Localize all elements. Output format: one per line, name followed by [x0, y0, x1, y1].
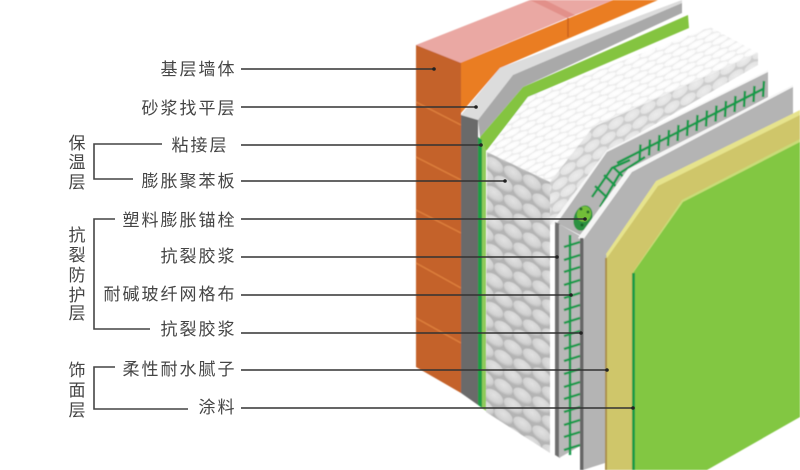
layer: mortar levelling coat: [461, 0, 682, 405]
group title: crack protection layer: 层: [68, 304, 86, 323]
leader: anchor: [241, 217, 587, 221]
leader: anti-crack mortar inner: [241, 255, 559, 259]
leader lines: [241, 67, 635, 410]
label: adhesive: 粘接层: [172, 136, 228, 155]
bracket: insulation layer: [94, 144, 162, 179]
label: mortar levelling coat: 砂浆找平层: [142, 99, 236, 118]
label: flexible waterproof putty: 柔性耐水腻子: [122, 360, 236, 379]
label: base wall: 基层墙体: [160, 60, 236, 79]
label: anti-crack mortar: 抗裂胶浆: [160, 320, 236, 339]
label: plastic anchor: 塑料膨胀锚栓: [122, 211, 236, 230]
leader: putty: [241, 368, 609, 372]
group title: insulation layer: [68, 134, 86, 192]
leader: anti-crack mortar outer: [241, 331, 583, 335]
leader: mortar levelling coat: [241, 105, 478, 109]
layer: outer anti-crack mortar: [578, 85, 793, 470]
bracket: crack protection layer: [94, 219, 150, 329]
leader: mesh: [241, 293, 573, 297]
group title: finish layer: [68, 361, 86, 420]
group title: crack protection layer: 裂: [68, 246, 86, 265]
group title: finish layer: 层: [68, 401, 86, 420]
layer labels: [104, 60, 236, 417]
bracket: finish layer: [94, 367, 188, 409]
label: alkali-resistant mesh: 耐碱玻纤网格布: [104, 285, 236, 304]
leader: adhesive: [241, 143, 483, 147]
label: polystyrene board: 膨胀聚苯板: [142, 172, 236, 191]
layer: polystyrene board: [486, 27, 758, 453]
leader: paint: [241, 406, 635, 410]
label: paint: 涂料: [198, 398, 236, 417]
leader: polystyrene board: [241, 179, 507, 183]
layer: alkali-resistant mesh: [564, 81, 764, 455]
layer: inner anti-crack mortar: [550, 70, 768, 458]
group title: finish layer: 面: [68, 381, 86, 400]
layer: brick base wall: [416, 0, 658, 393]
layer: flexible waterproof putty: [605, 110, 800, 470]
group title: crack protection layer: [68, 226, 86, 323]
label: anti-crack mortar: 抗裂胶浆: [160, 247, 236, 266]
group titles: [68, 134, 86, 420]
wall section illustration: [416, 0, 800, 470]
layer: paint: [632, 142, 800, 470]
group brackets: [94, 144, 188, 409]
group title: insulation layer: 温: [68, 153, 86, 172]
group title: crack protection layer: 防: [68, 266, 86, 285]
group title: insulation layer: 层: [68, 173, 86, 192]
group title: crack protection layer: 抗: [68, 226, 86, 245]
layer: adhesive: [478, 15, 689, 411]
icon: plastic expansion anchor: [570, 203, 596, 233]
group title: finish layer: 饰: [68, 361, 86, 380]
group title: insulation layer: 保: [68, 134, 86, 153]
leader: base wall: [241, 67, 436, 71]
group title: crack protection layer: 护: [68, 286, 86, 305]
